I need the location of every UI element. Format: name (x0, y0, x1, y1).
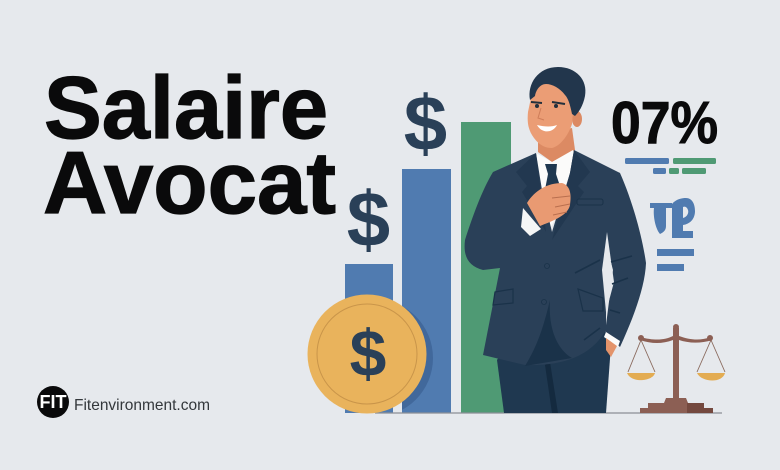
icon: scales of justice (627, 324, 725, 413)
infographic canvas (37, 67, 726, 418)
percentage figure: 07% (611, 90, 718, 156)
sleeve creases (575, 256, 632, 340)
smile (537, 125, 557, 131)
logo: Fitenvironment: Fitenvironment.com (74, 397, 210, 414)
shirt (536, 150, 578, 232)
title (43, 58, 336, 232)
hair (530, 67, 585, 116)
pockets (493, 289, 513, 305)
eyes and brows (531, 102, 565, 104)
trousers (497, 320, 611, 413)
jacket opening (525, 300, 572, 366)
ear (572, 111, 582, 127)
logo: Fitenvironment: FIT (40, 392, 66, 412)
tie (543, 164, 560, 200)
buttons (544, 264, 550, 268)
hand (527, 183, 571, 226)
left cuff (521, 208, 541, 236)
gap between arm and body (602, 232, 614, 312)
jacket (465, 150, 620, 365)
icon: gold coin (308, 294, 426, 414)
nose (538, 108, 544, 120)
title: Salaire (44, 58, 328, 157)
icon: dollar sign above short bar: $ (347, 175, 390, 263)
head (528, 78, 574, 148)
title: Avocat (43, 133, 336, 232)
lapels (516, 153, 546, 232)
icon: dollar sign above tall bar: $ (404, 79, 447, 167)
logo: Fitenvironment (37, 386, 210, 418)
icon: blue symbol (650, 198, 695, 271)
right arm (605, 170, 646, 347)
neck (538, 128, 575, 162)
icon: gold coin: $ (350, 316, 386, 390)
illustration: man in suit (465, 67, 646, 413)
bar chart (315, 122, 722, 417)
cuff and hand in pocket (604, 332, 620, 347)
mini legend bars (625, 158, 716, 174)
